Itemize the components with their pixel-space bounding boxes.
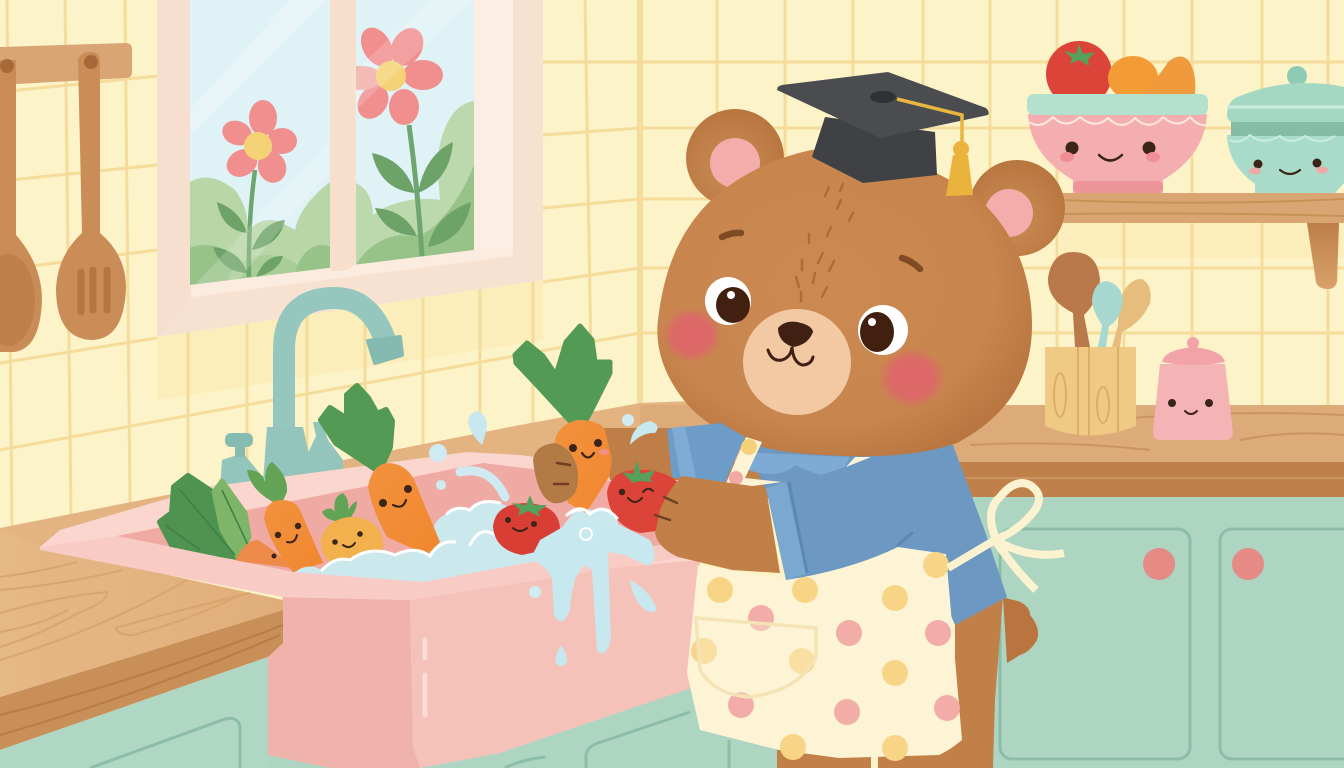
- soap foam: [293, 502, 630, 590]
- muzzle: [743, 309, 851, 415]
- under-sink cabinets: [265, 660, 805, 768]
- apron bow: [948, 483, 1064, 590]
- right pane garden: [356, 28, 474, 264]
- left sleeve: [667, 423, 745, 487]
- graduation cap: [777, 72, 989, 196]
- carrot held in hand: [515, 326, 612, 513]
- legs: [777, 597, 1003, 768]
- hidden carrot: [235, 540, 293, 568]
- pink bowl: [1028, 114, 1207, 193]
- left tap: [220, 453, 263, 490]
- green pot: [1227, 66, 1344, 193]
- rack: [0, 43, 132, 84]
- left hand: [533, 443, 578, 503]
- utensil jar: [1045, 252, 1151, 437]
- collar: [748, 453, 850, 475]
- left face: [268, 597, 420, 768]
- eyebrows: [722, 233, 920, 269]
- fur marks: [796, 184, 853, 301]
- slotted spoon: [56, 52, 126, 340]
- bear lower body: [777, 597, 1038, 768]
- right arm: [655, 476, 780, 573]
- eyes: [705, 277, 908, 355]
- sink front rim: [40, 536, 700, 600]
- tail: [1003, 597, 1038, 663]
- left arm: [600, 428, 680, 480]
- right face: [410, 550, 700, 768]
- big carrot: [321, 386, 440, 555]
- tomato held by the bear: [607, 460, 683, 533]
- apron strap: [723, 437, 782, 490]
- tomato in bowl: [1046, 41, 1112, 107]
- leafy greens: [160, 476, 249, 557]
- bowl of vegetables: [1027, 41, 1208, 193]
- bear head: [657, 149, 1032, 456]
- right sleeve: [766, 480, 912, 580]
- tomato in sink: [493, 495, 560, 555]
- right cabinets: [955, 497, 1344, 768]
- left spoon: [0, 60, 42, 352]
- spout: [284, 298, 385, 430]
- back counter: [0, 400, 1344, 600]
- apron: [687, 547, 962, 761]
- cheeks: [662, 307, 722, 363]
- window: [157, 0, 543, 337]
- left counter: [0, 528, 283, 750]
- pocket: [696, 618, 816, 697]
- hanging utensils: [0, 43, 132, 352]
- left pane garden: [190, 100, 330, 285]
- nose: [778, 322, 813, 347]
- sink basin and back rim: [40, 452, 700, 597]
- faucet: [220, 298, 402, 490]
- foam behind big carrot: [430, 502, 530, 570]
- carrot in bowl: [1142, 56, 1195, 94]
- sink body: [268, 550, 700, 768]
- round yellow carrot: [321, 493, 383, 569]
- mouth: [768, 347, 813, 365]
- bear shirt: [745, 445, 1007, 625]
- shelf: [1060, 193, 1344, 289]
- bear ears: [686, 109, 1065, 256]
- small carrot: [247, 462, 323, 572]
- right tap: [308, 422, 343, 476]
- water splashes: [429, 411, 658, 666]
- vegetables in sink: [160, 386, 630, 590]
- pink jar: [1153, 337, 1233, 440]
- left cabinet: [0, 657, 268, 768]
